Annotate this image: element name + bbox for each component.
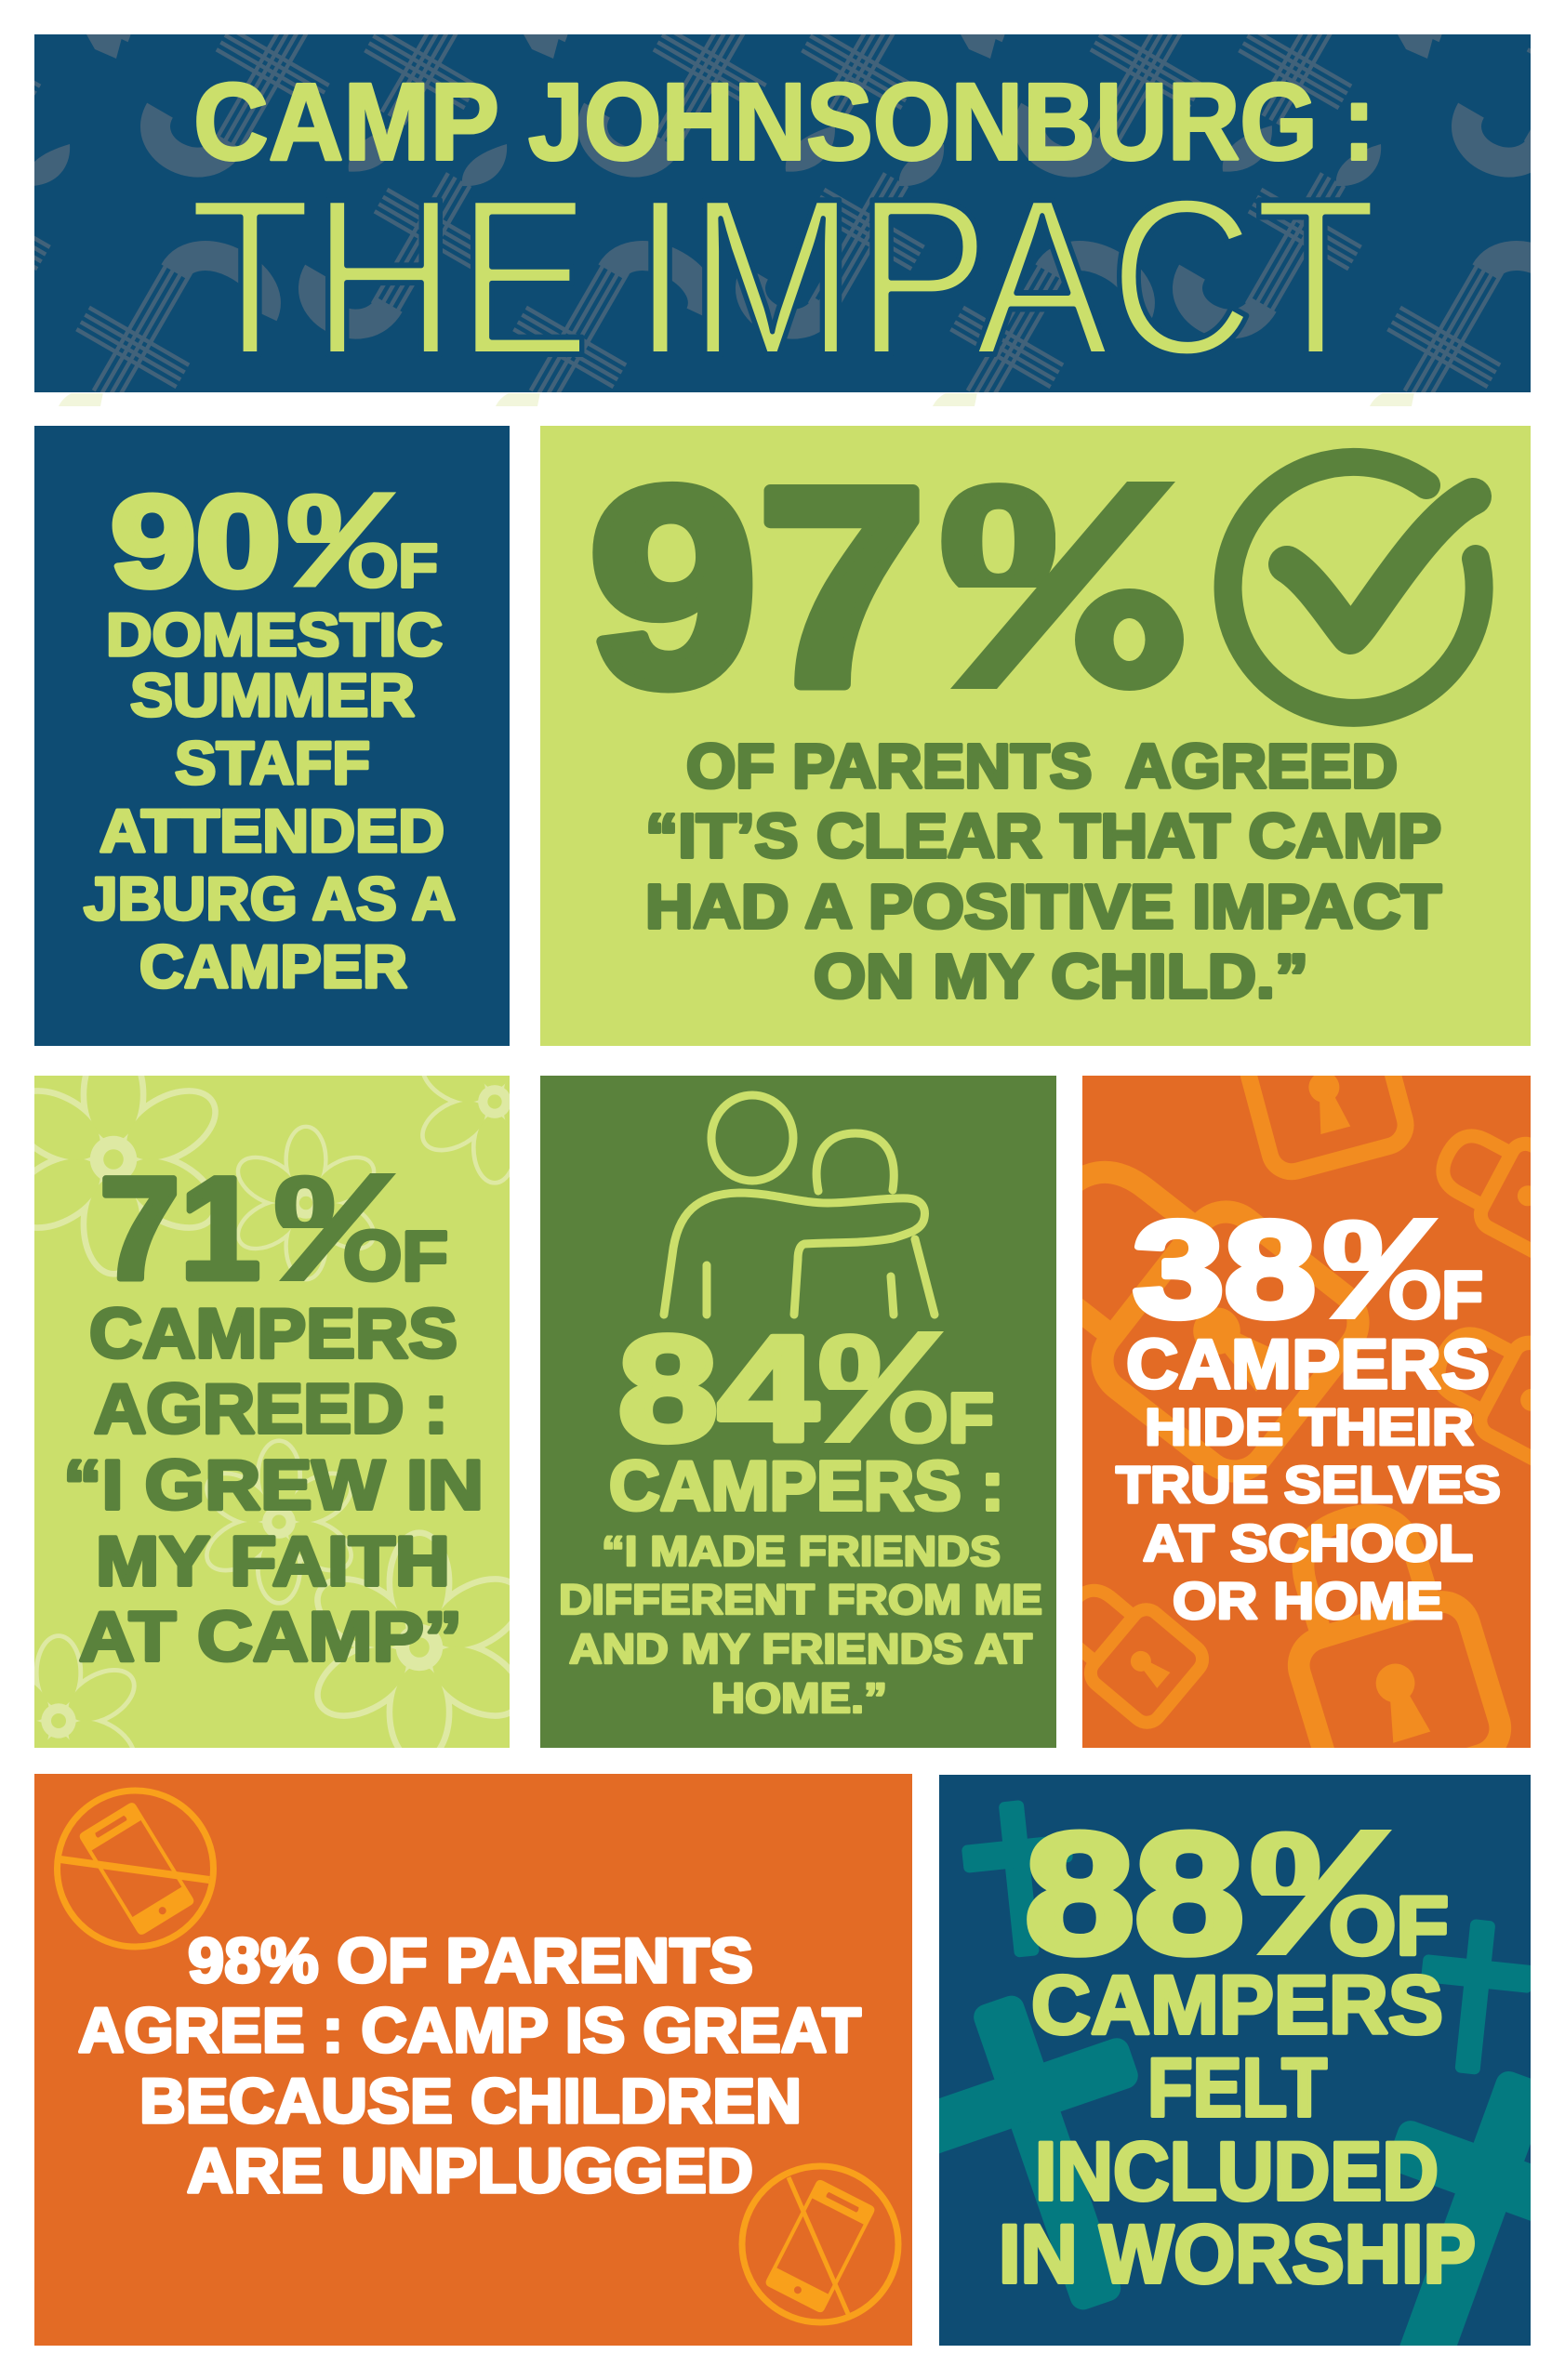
stat: 90%	[112, 492, 437, 590]
decorative flowers	[0, 1023, 573, 1804]
text: felt included in worship: IN WORSHIP	[999, 2207, 1476, 2300]
icon: no phone bottom right	[742, 2166, 898, 2322]
decorative crosses	[939, 1800, 1531, 2346]
text: domestic summer staff: JBURG AS A	[84, 865, 456, 932]
text: felt included in worship: CAMPERS	[1031, 1958, 1443, 2051]
panel: 97% of parents	[540, 426, 1531, 1046]
text: faith quote: “I GREW IN	[63, 1446, 484, 1524]
text: faith quote	[63, 1294, 484, 1675]
text: faith quote: AT CAMP”	[79, 1597, 462, 1675]
stat: 97%: %	[938, 435, 1209, 715]
decorative padlocks	[988, 938, 1565, 1799]
text: friends quote: “I MADE FRIENDS	[602, 1527, 1001, 1575]
text: domestic summer staff	[84, 601, 456, 1000]
text: unplugged statement	[78, 1925, 861, 2206]
text: domestic summer staff: DOMESTIC	[106, 601, 443, 668]
panel: 98% of parents unplugged	[34, 1774, 912, 2346]
text: parents quote	[645, 732, 1441, 1012]
text: domestic summer staff: ATTENDED	[99, 797, 444, 865]
heading: the impact: IMPACT	[632, 152, 1377, 403]
stat: 97%	[592, 482, 1184, 694]
stat: 84%: OF	[889, 1379, 994, 1458]
banner logo pattern	[34, 34, 1531, 392]
stat: 88%: %	[1250, 1802, 1412, 1975]
heading: the impact	[189, 152, 1377, 403]
text: domestic summer staff: STAFF	[175, 729, 370, 797]
text: faith quote: AGREED :	[94, 1369, 448, 1448]
stat: 71%: %	[273, 1149, 414, 1295]
text: friends quote: DIFFERENT FROM ME	[559, 1576, 1042, 1623]
stat: 38%: 38	[1133, 1194, 1316, 1346]
text: hide true selves: AT SCHOOL	[1143, 1514, 1473, 1572]
text: friends quote: AND MY FRIENDS AT	[569, 1625, 1032, 1673]
text: campers label: CAMPERS :	[609, 1447, 1004, 1525]
stat: 71%: OF	[343, 1217, 448, 1296]
stat: 71%: 71	[99, 1148, 260, 1310]
stat: 88%	[1027, 1830, 1448, 1958]
panel: 38% of campers	[1082, 1076, 1531, 1748]
stat: 90%: OF	[348, 531, 438, 600]
panel: 84% of campers	[540, 1076, 1056, 1748]
text: parents quote: ON MY CHILD.”	[814, 942, 1308, 1012]
text: domestic summer staff: SUMMER	[130, 661, 415, 729]
stat: 84%: %	[817, 1307, 962, 1458]
text: hide true selves: OR HOME	[1173, 1571, 1443, 1630]
text: felt included in worship: FELT	[1147, 2041, 1327, 2134]
text: unplugged statement: ARE UNPLUGGED	[187, 2135, 753, 2206]
panel: 90% domestic summer staff	[34, 426, 510, 1046]
stat: 90%: %	[286, 472, 412, 601]
stat: 84%: 84	[617, 1305, 818, 1473]
heading: camp name: CAMP	[193, 61, 499, 184]
text: parents quote: “IT’S CLEAR THAT CAMP	[645, 801, 1441, 871]
text: friends quote	[559, 1527, 1042, 1722]
heading: the impact: THE	[189, 152, 590, 403]
panel: 71% of campers	[34, 1076, 510, 1748]
text: faith quote: MY FAITH	[96, 1522, 450, 1600]
heading: camp name: JOHNSONBURG	[528, 61, 1318, 184]
stat: 38%: %	[1322, 1196, 1460, 1331]
stat: 71%	[102, 1173, 448, 1283]
text: parents quote: HAD A POSITIVE IMPACT	[645, 872, 1441, 942]
text: felt included in worship	[999, 1958, 1476, 2300]
text: unplugged statement: 98% OF PARENTS	[188, 1925, 753, 1996]
stat: 38%	[1133, 1218, 1482, 1322]
stat: 97%: 97	[589, 430, 926, 745]
stat: 88%: OF	[1329, 1879, 1449, 1972]
stat: 38%: OF	[1388, 1259, 1483, 1333]
text: unplugged statement: AGREE : CAMP IS GREAT	[78, 1995, 861, 2066]
icon: check mark in circle	[1228, 462, 1479, 713]
text: unplugged statement: BECAUSE CHILDREN	[139, 2066, 802, 2136]
text: hide true selves: TRUE SELVES	[1116, 1455, 1501, 1514]
panel: title banner	[34, 34, 1531, 392]
text: hide true selves: HIDE THEIR	[1145, 1397, 1474, 1456]
text: hide true selves: CAMPERS	[1126, 1325, 1490, 1403]
heading: camp name: :	[1343, 61, 1375, 184]
text: parents quote: OF PARENTS AGREED	[686, 732, 1398, 801]
text: friends quote: HOME.”	[711, 1674, 887, 1722]
text: felt included in worship: INCLUDED	[1035, 2124, 1439, 2217]
icon: two friends	[664, 1095, 935, 1315]
faint leaves below banner	[59, 393, 1414, 406]
stat: 88%: 88	[1025, 1797, 1244, 1989]
stat: 90%: 90	[111, 469, 281, 614]
panel: 88% of campers	[939, 1775, 1531, 2346]
text: hide true selves	[1116, 1325, 1501, 1630]
text: faith quote: CAMPERS	[89, 1294, 458, 1372]
text: domestic summer staff: CAMPER	[139, 932, 407, 1000]
icon: no phone top left	[58, 1791, 214, 1947]
stat: 84%	[619, 1331, 993, 1445]
